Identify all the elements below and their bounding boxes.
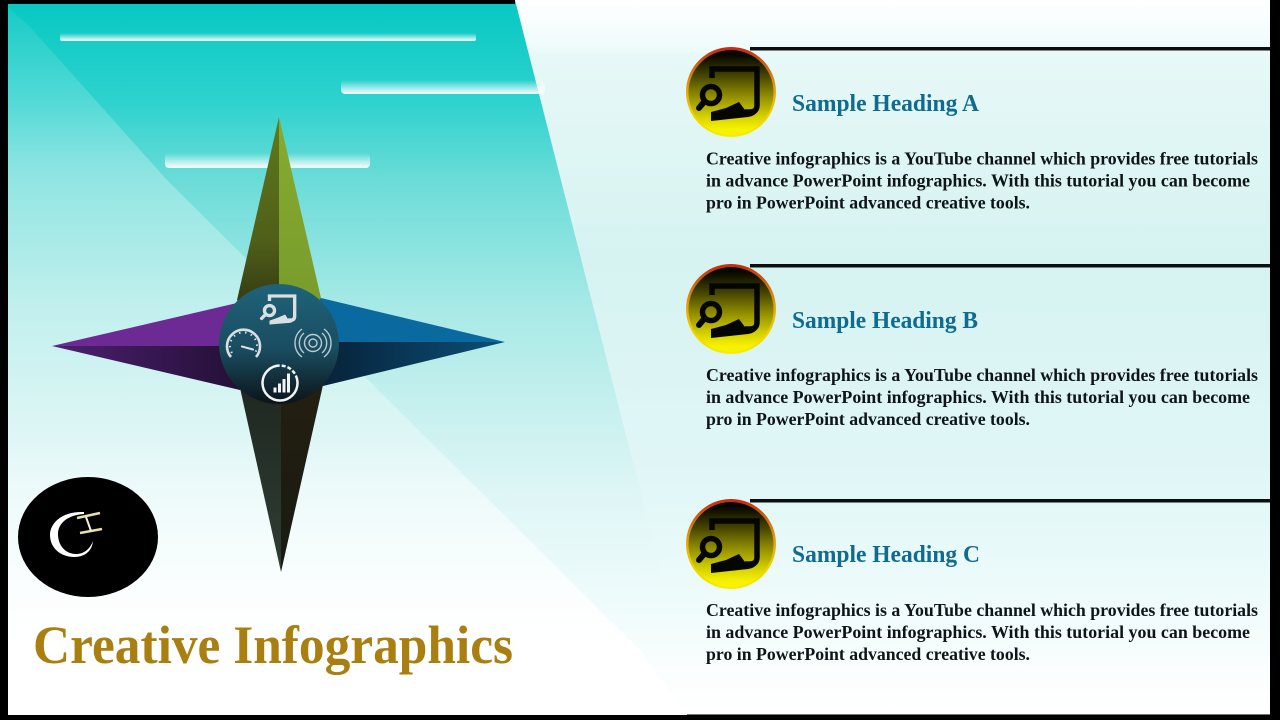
body C [706,600,1258,664]
hub icon: concentric rings [295,329,331,357]
bottom blade [240,343,323,572]
section B [686,264,1270,429]
badge A [686,47,776,137]
compass star [52,117,505,572]
heading B: Sample Heading B [792,308,978,334]
left blade [52,303,279,390]
hub icon: gauge [227,330,260,357]
body B: pro in PowerPoint advanced creative tools. [706,409,1030,429]
body B: Creative infographics is a YouTube channel which provides free tutorials [706,365,1258,385]
section C [686,499,1270,664]
body C: Creative infographics is a YouTube channel which provides free tutorials [706,600,1258,620]
cloud bars [60,33,545,168]
hub icon: image search [262,296,295,325]
badge B [686,264,776,354]
body B: in advance PowerPoint infographics. With this tutorial you can become [706,387,1250,407]
top blade [237,117,321,343]
body A: pro in PowerPoint advanced creative tools. [706,192,1030,212]
badge C [686,499,776,589]
body C: pro in PowerPoint advanced creative tools. [706,644,1030,664]
rule B [750,264,1270,268]
title: Creative Infographics [33,615,513,675]
heading A: Sample Heading A [792,91,980,117]
rule A [750,47,1270,50]
body A [706,148,1258,212]
rule C [750,499,1270,502]
right blade [279,298,505,386]
body C: in advance PowerPoint infographics. With this tutorial you can become [706,622,1250,642]
center hub [219,284,339,404]
body A: Creative infographics is a YouTube channel which provides free tutorials [706,148,1258,168]
body A: in advance PowerPoint infographics. With this tutorial you can become [706,170,1250,190]
heading C: Sample Heading C [792,542,980,568]
hub icon: bar chart ring [262,366,298,400]
logo [18,477,158,597]
body B [706,365,1258,429]
section A [686,47,1270,212]
